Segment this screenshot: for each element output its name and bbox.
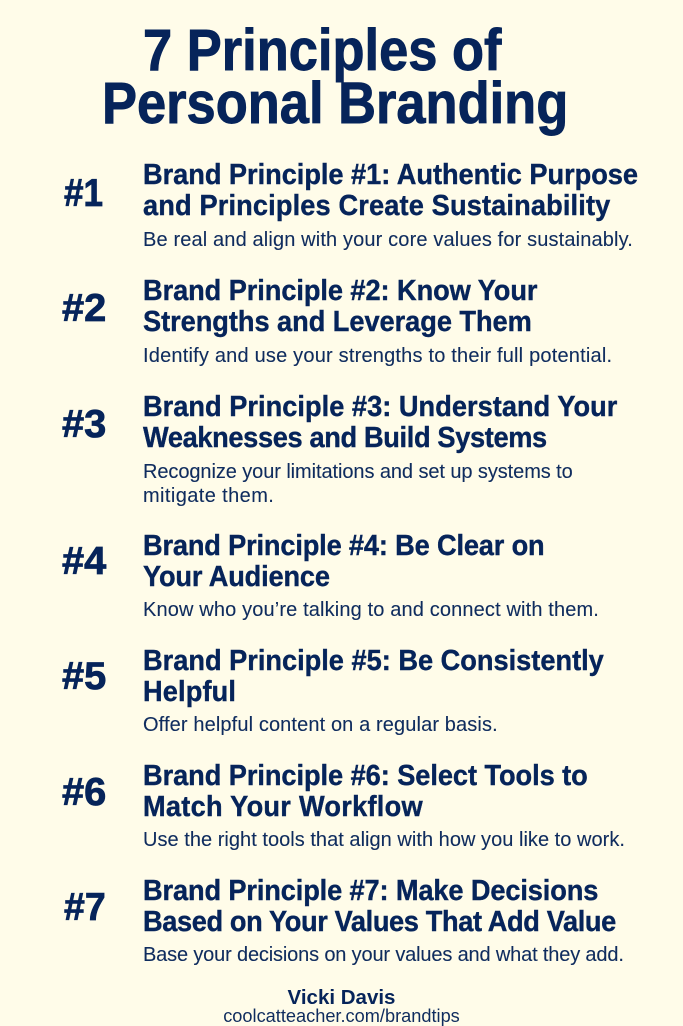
heading 3: Weaknesses and Build Systems [143,422,547,454]
number 5: #5 [62,655,106,698]
heading 6 [143,760,588,822]
principle 6 [62,760,625,851]
heading 1: and Principles Create Sustainability [143,190,610,222]
principle 1 [64,159,638,251]
heading 6: Match Your Workflow [143,790,423,822]
description 2: Identify and use your strengths to their full potential. [143,345,612,367]
title: 7 Principles of [143,18,501,83]
description 1: Be real and align with your core values for sustainably. [143,229,633,251]
heading 2 [143,275,538,338]
heading 4 [143,530,544,592]
heading 4: Your Audience [143,560,330,592]
number 6: #6 [62,771,106,814]
number 7: #7 [64,886,106,929]
heading 5: Helpful [143,676,236,708]
heading 5 [143,645,604,708]
footer credit [223,986,460,1026]
heading 2: Brand Principle #2: Know Your [143,275,537,307]
principle 7 [64,875,624,966]
heading 5: Brand Principle #5: Be Consistently [143,645,604,677]
principle 5 [62,645,604,736]
title: Personal Branding [102,71,568,136]
number 4: #4 [62,540,106,583]
description 5: Offer helpful content on a regular basis. [143,714,498,736]
heading 7 [143,875,616,938]
description 3: mitigate them. [143,485,274,507]
author name: Vicki Davis [288,986,395,1009]
heading 4: Brand Principle #4: Be Clear on [143,530,544,562]
description 3: Recognize your limitations and set up systems to [143,461,573,483]
number 3: #3 [62,403,106,446]
heading 1: Brand Principle #1: Authentic Purpose [143,159,638,191]
heading 2: Strengths and Leverage Them [143,306,532,338]
number 2: #2 [62,287,106,330]
title [102,18,568,136]
heading 3 [142,391,618,454]
principle 4 [62,530,599,621]
heading 7: Brand Principle #7: Make Decisions [143,875,598,907]
number 1: #1 [64,172,103,215]
heading 3: Brand Principle #3: Understand Your [143,391,617,423]
principle 2 [62,275,612,367]
heading 6: Brand Principle #6: Select Tools to [143,760,588,792]
description 6: Use the right tools that align with how you like to work. [143,829,625,851]
description 3 [143,461,573,507]
principle 3 [62,391,618,507]
heading 1 [143,159,638,222]
description 4: Know who you’re talking to and connect with them. [143,599,599,621]
heading 7: Based on Your Values That Add Value [143,906,616,938]
website: coolcatteacher.com/brandtips [223,1006,460,1026]
description 7: Base your decisions on your values and what they add. [143,944,624,966]
